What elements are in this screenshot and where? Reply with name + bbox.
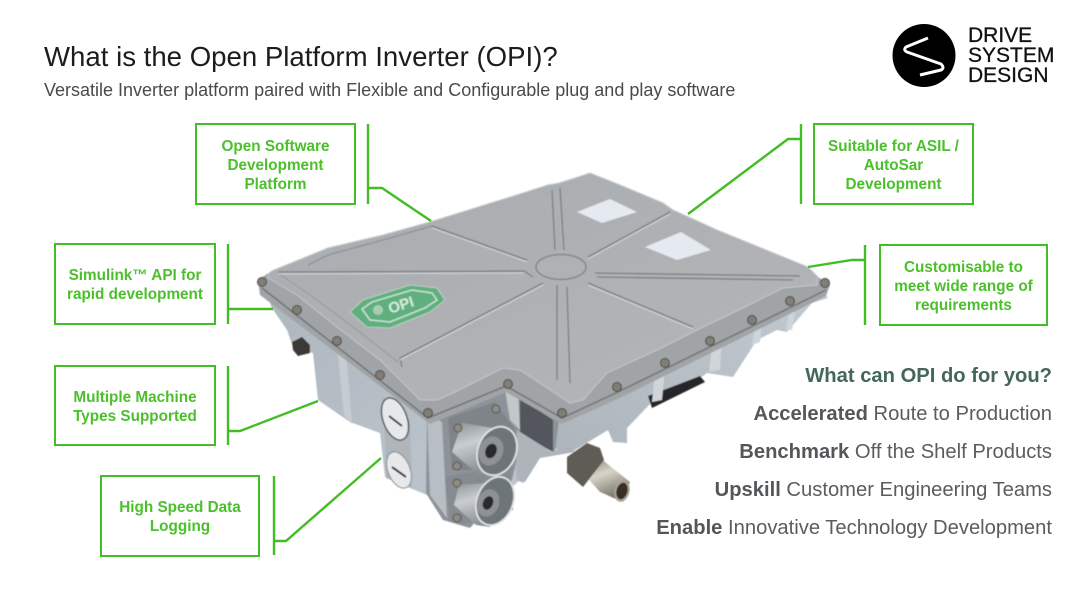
- lid bolts: [258, 278, 830, 418]
- HV connector bottom: [454, 471, 521, 531]
- lid ribs: [278, 188, 800, 383]
- leader: open software: [368, 124, 431, 221]
- HV connector top: [452, 421, 524, 481]
- leader: customisable: [808, 245, 865, 325]
- right housing wall: [517, 290, 828, 483]
- callout: simulink: rapid development: [67, 286, 203, 303]
- benefit: upskill: Upskill Customer Engineering Teams: [715, 479, 1052, 501]
- callout: data logging: High Speed Data: [119, 499, 241, 516]
- benefit: accelerated: Accelerated Route to Production: [753, 403, 1052, 425]
- logo: Drive System Design: [892, 24, 1054, 87]
- subtitle: Versatile Inverter platform paired with Flexible and Configurable plug and play software: [44, 80, 735, 100]
- callout: simulink: [54, 243, 216, 325]
- callout: open software: Open Software: [222, 138, 329, 154]
- callout: customisable: meet wide range of: [894, 278, 1033, 294]
- OPI badge: OPI: [386, 293, 416, 318]
- logo: Drive System Design: DRIVE: [968, 24, 1032, 47]
- callout: customisable: [879, 244, 1048, 326]
- callout: data logging: Logging: [150, 518, 210, 535]
- callout: customisable: Customisable to: [904, 258, 1023, 276]
- OPI badge: [350, 285, 445, 328]
- connector bay: [426, 376, 575, 528]
- benefits heading: What can OPI do for you?: [805, 365, 1052, 387]
- callout: ASIL: Development: [845, 176, 942, 192]
- connector plate screws: [453, 405, 500, 522]
- callout: ASIL: [813, 123, 974, 205]
- label patches: [577, 199, 711, 260]
- side plug: [292, 337, 310, 356]
- leader: ASIL: [688, 124, 801, 214]
- flange groove: [262, 288, 826, 418]
- callout: machine types: [54, 365, 216, 446]
- lid hub: [536, 254, 586, 280]
- callout: open software: Development: [227, 156, 324, 174]
- service ports: [376, 394, 416, 492]
- benefit: enable: Enable Innovative Technology Development: [656, 517, 1052, 539]
- callout: open software: Platform: [244, 176, 307, 192]
- title: What is the Open Platform Inverter (OPI)?: [44, 41, 558, 72]
- benefit: benchmark: Benchmark Off the Shelf Products: [739, 441, 1052, 463]
- callout: customisable: requirements: [915, 296, 1012, 314]
- callout: machine types: Types Supported: [73, 408, 197, 424]
- leader: machine types: [228, 366, 318, 445]
- leader: simulink: [228, 244, 273, 324]
- left housing wall: [264, 288, 540, 525]
- leader: data logging: [274, 458, 381, 555]
- cable gland: [567, 443, 632, 504]
- flange: [258, 173, 830, 424]
- logo: Drive System Design: SYSTEM: [968, 44, 1054, 67]
- callout: data logging: [100, 475, 260, 557]
- callout: open software: [195, 123, 356, 205]
- callout: simulink: Simulink™ API for: [69, 267, 201, 284]
- callout: ASIL: Suitable for ASIL /: [828, 138, 959, 154]
- callout: ASIL: AutoSar: [864, 156, 923, 174]
- lid: [268, 173, 818, 403]
- logo: Drive System Design: DESIGN: [968, 64, 1049, 87]
- callout: machine types: Multiple Machine: [73, 388, 197, 406]
